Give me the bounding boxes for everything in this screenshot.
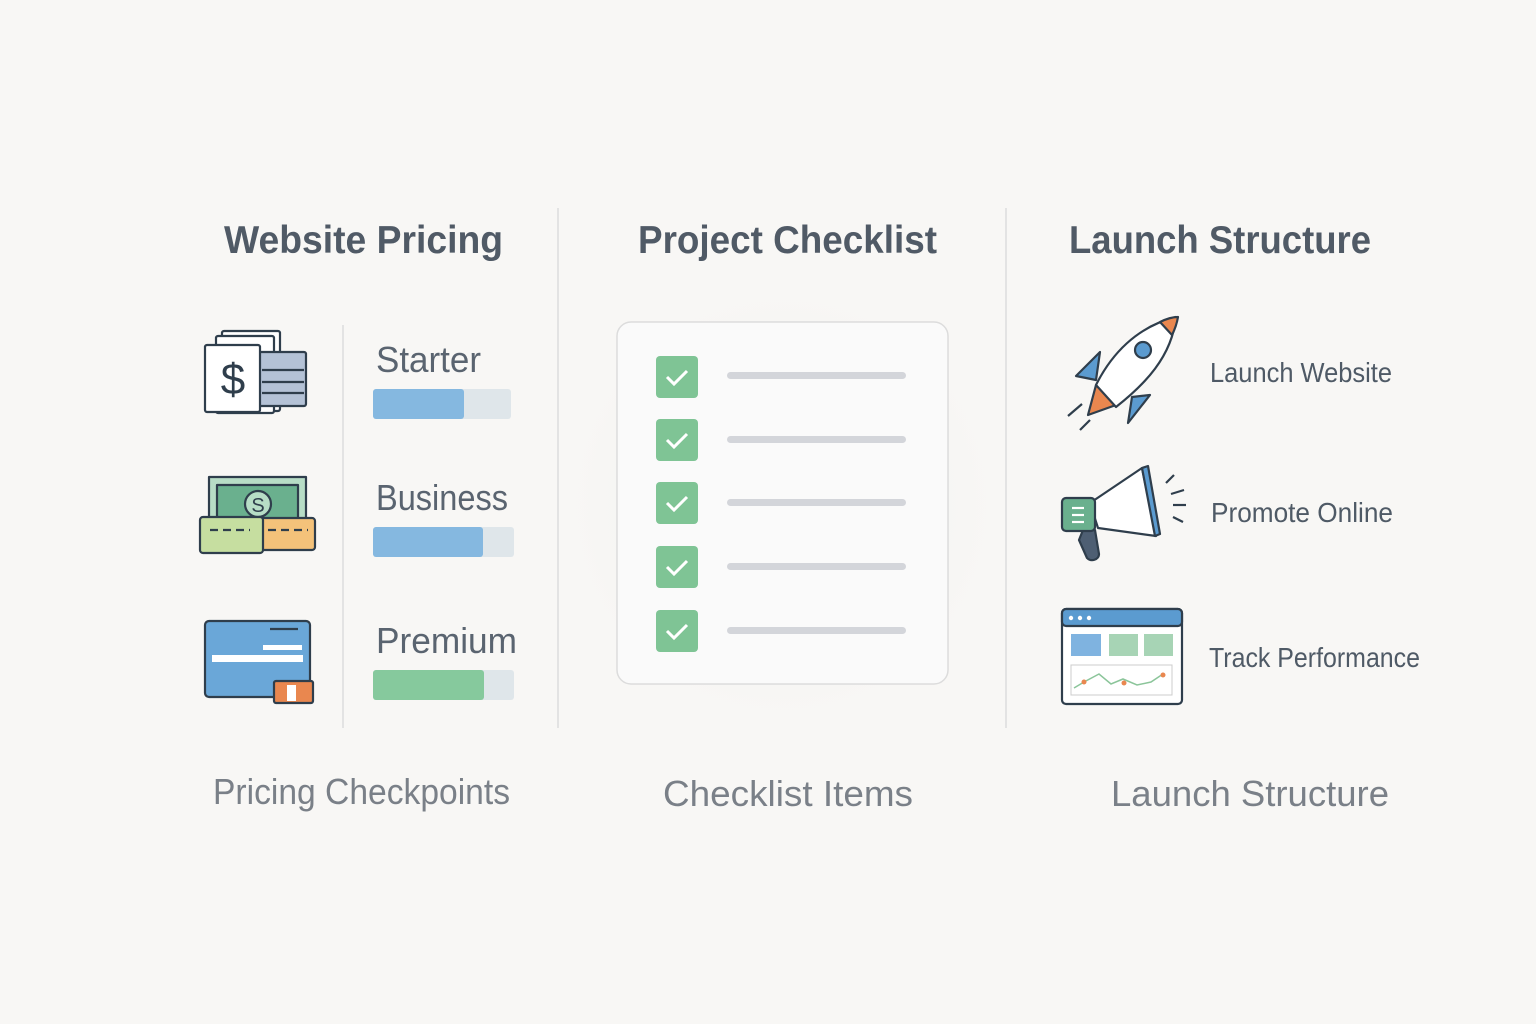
checklist items: [656, 356, 906, 652]
panel: launch: [1062, 317, 1420, 704]
icon: megaphone: [1062, 466, 1186, 560]
bar: Business: [373, 527, 514, 557]
panel: pricing: [200, 331, 517, 703]
label: Track Performance: Track Performance: [1209, 642, 1420, 673]
label: Launch Website: Launch Website: [1210, 357, 1392, 388]
footer: Checklist Items: Checklist Items: [663, 773, 913, 814]
title: Project Checklist: Project Checklist: [638, 219, 937, 262]
title: Website Pricing: Website Pricing: [224, 219, 503, 262]
icon: bills with dollar: [205, 331, 306, 413]
label: Business: Business: [376, 477, 508, 518]
label: Starter: Starter: [376, 339, 481, 380]
bar: Premium: [373, 670, 514, 700]
icon: analytics browser: [1062, 609, 1182, 704]
icon: credit card: [205, 621, 313, 703]
panel: checklist card: [617, 322, 948, 684]
title: Launch Structure: Launch Structure: [1069, 219, 1371, 262]
icon: cash and cards: [200, 477, 315, 553]
footer: Pricing Checkpoints: Pricing Checkpoints: [213, 771, 510, 812]
bar: Starter: [373, 389, 511, 419]
icon: bills with dollar: $: [221, 355, 245, 404]
icon: rocket: [1068, 317, 1178, 430]
icon: cash and cards: S: [251, 495, 265, 517]
footer: Launch Structure: Launch Structure: [1111, 773, 1389, 814]
label: Premium: Premium: [376, 620, 517, 661]
label: Promote Online: Promote Online: [1211, 497, 1393, 528]
